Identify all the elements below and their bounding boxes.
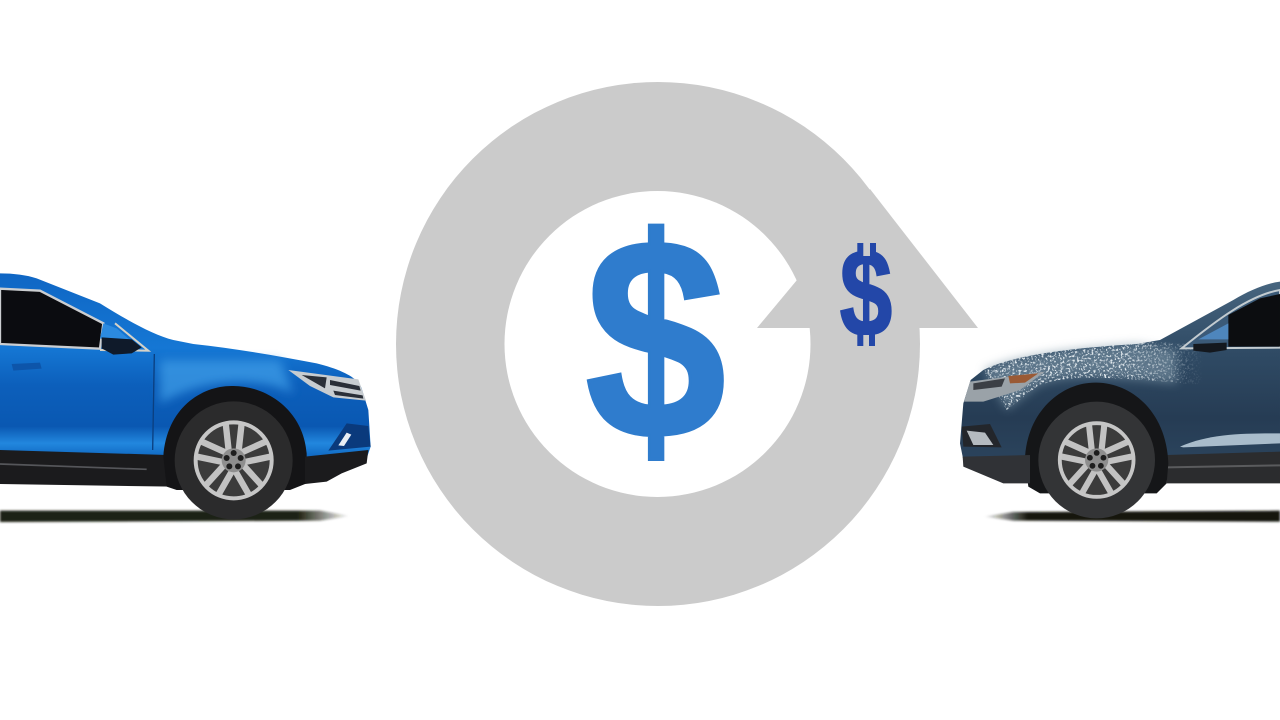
wheel arch: [1025, 383, 1168, 493]
car shadow: [983, 511, 1280, 522]
sill: [1167, 452, 1280, 483]
dirty car: [960, 282, 1280, 522]
prongs: [857, 243, 876, 346]
fog lamp: [962, 424, 1002, 447]
side mirror: [1193, 343, 1227, 353]
small dollar sign: [840, 224, 892, 363]
window corner: [100, 323, 138, 347]
headlight: [288, 370, 366, 401]
large dollar sign: $: [585, 179, 726, 499]
window pillar panel: [1182, 290, 1280, 348]
car shadow: [0, 511, 350, 522]
front bumper: [963, 455, 1030, 483]
cycle arrow: [396, 82, 978, 606]
dirt on hood: [983, 344, 1177, 410]
door seam: [153, 354, 154, 450]
fog lamp: [328, 423, 371, 451]
glyph: $: [840, 224, 892, 363]
fender highlight: [160, 360, 293, 403]
headlight: [964, 372, 1045, 402]
ring: [396, 82, 920, 606]
side mirror: [102, 337, 142, 355]
chrome sill line: [100, 323, 148, 351]
blue car: [0, 273, 371, 522]
window corner: [1198, 323, 1228, 339]
ring centre: [504, 191, 810, 497]
car body: [0, 273, 371, 460]
front wheel: [175, 401, 293, 519]
arrow head: [757, 189, 978, 328]
side highlight: [1180, 433, 1280, 447]
door handle: [12, 363, 42, 371]
front wheel: [1038, 402, 1155, 518]
illustration: blue car, cycle arrow, dirty car: [0, 82, 1280, 606]
car body: [960, 282, 1280, 463]
front bumper: [305, 450, 368, 484]
wheel arch: [163, 386, 307, 490]
prong gaps: [863, 240, 870, 349]
side window: [1228, 294, 1280, 347]
side window: [0, 289, 103, 349]
sill: [0, 450, 173, 487]
dirt speckle: [983, 342, 1203, 410]
